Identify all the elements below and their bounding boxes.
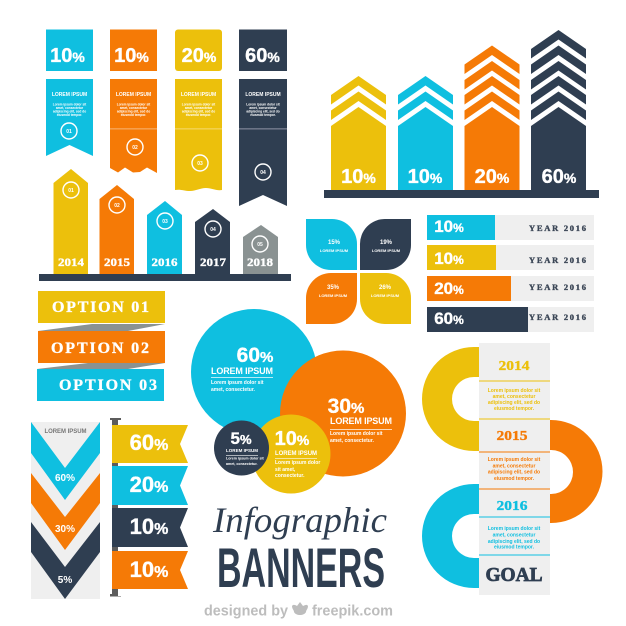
timeline: 2016: adipiscing elit, sed do bbox=[488, 539, 540, 545]
ribbon: yellow 03: eiusmod tempor. bbox=[186, 113, 211, 117]
timeline: 2014 bbox=[479, 359, 550, 420]
column: yellow 10%: 10% bbox=[341, 166, 376, 188]
ribbon: navy 04: 04 bbox=[260, 170, 266, 176]
text: 10%: Lorem ipsum dolor bbox=[275, 460, 320, 466]
bar: yellow 10% bbox=[427, 245, 594, 270]
ribbon: orange 02: LOREM IPSUM bbox=[116, 92, 151, 98]
credit: freepik.com: freepik.com bbox=[312, 604, 393, 620]
circle: yellow 10% bbox=[252, 414, 330, 494]
panel: petal chart bbox=[306, 219, 411, 324]
panel: overlapping circles bbox=[191, 309, 406, 494]
fold: upper bbox=[38, 324, 165, 331]
chevron: blue 60% bbox=[31, 422, 100, 500]
circle: blue 60% bbox=[191, 309, 317, 435]
timeline: 2014: amet, consectetur bbox=[493, 394, 535, 400]
ribbon: navy 04: eiusmod tempor. bbox=[250, 113, 276, 117]
text: 30%: LOREM IPSUM bbox=[330, 416, 392, 426]
text: 5% bbox=[226, 429, 265, 466]
title bbox=[212, 500, 387, 599]
ribbon: yellow 03: LOREM IPSUM bbox=[181, 92, 216, 98]
ribbon: navy 04: adipiscing elit, sed do bbox=[246, 110, 280, 114]
panel: downward chevrons bbox=[31, 422, 100, 599]
text: 5%: 5% bbox=[230, 429, 252, 448]
arrow: 2014: 01 bbox=[68, 188, 74, 194]
ribbon: blue 01: amet, consectetur bbox=[56, 106, 84, 110]
text: 60%: Lorem ipsum dolor sit bbox=[211, 380, 264, 386]
column: yellow 10% bbox=[331, 76, 386, 190]
flag pole bbox=[110, 418, 121, 596]
tab: orange 10% bbox=[110, 30, 157, 71]
ribbon: yellow 03: Lorem ipsum dolor sit bbox=[182, 102, 216, 106]
arrow: 2018: 05 bbox=[257, 242, 263, 248]
ribbon: blue 01: Lorem ipsum dolor sit bbox=[53, 102, 87, 106]
tab: orange 10%: 10% bbox=[114, 45, 149, 67]
title: Infographic: Infographic bbox=[212, 500, 387, 540]
banner: option 02: OPTION 02 bbox=[51, 340, 149, 357]
text: 10%: sit amet, bbox=[275, 467, 296, 473]
base bar bbox=[324, 190, 599, 198]
title: BANNERS: BANNERS bbox=[217, 536, 385, 599]
flag: orange 10%: 10% bbox=[130, 557, 168, 582]
panel: year arrows bbox=[39, 169, 291, 281]
banner: option 03: OPTION 03 bbox=[59, 377, 157, 394]
ribbon: blue 01: 01 bbox=[66, 129, 72, 135]
arrow: 2018: 2018 bbox=[247, 257, 273, 269]
circle: navy 5% bbox=[214, 420, 269, 476]
panel: percentage tabs bbox=[46, 30, 287, 71]
text: 30%: Lorem ipsum dolor sit bbox=[330, 431, 383, 437]
flag: yellow 60%: 60% bbox=[130, 430, 168, 455]
petal: yellow 26%: LOREM IPSUM bbox=[371, 293, 400, 298]
flag: yellow 60% bbox=[112, 425, 188, 463]
text: 60%: amet, consectetur. bbox=[211, 387, 256, 393]
text: 60%: LOREM IPSUM bbox=[211, 366, 273, 376]
arrow: 2015 bbox=[100, 185, 134, 274]
bar: navy 60%: YEAR 2016 bbox=[529, 312, 586, 322]
panel: option banners bbox=[37, 291, 165, 401]
timeline: 2016: eiusmod tempor. bbox=[494, 544, 535, 550]
petal: orange 35%: LOREM IPSUM bbox=[319, 293, 348, 298]
arrow: 2017 bbox=[195, 209, 230, 274]
banner: option 01: OPTION 01 bbox=[52, 299, 149, 316]
timeline: 2015 bbox=[479, 429, 550, 490]
panel: flag banners bbox=[110, 418, 188, 596]
chevron: blue 60%: 60% bbox=[55, 473, 75, 484]
text: 10% bbox=[275, 428, 320, 479]
column: orange 20%: 20% bbox=[475, 166, 510, 188]
petal: blue 15%: 15% bbox=[328, 240, 341, 246]
ribbon: orange 02: eiusmod tempor. bbox=[121, 113, 146, 117]
petal: yellow 26% bbox=[360, 273, 411, 324]
petal: navy 19% bbox=[360, 219, 411, 270]
credit: designed by: designed by bbox=[204, 604, 288, 620]
column: orange 20% bbox=[464, 46, 520, 190]
tab: navy 60% bbox=[239, 30, 287, 71]
timeline: 2016 bbox=[479, 499, 550, 556]
base bar bbox=[39, 274, 291, 281]
petal: navy 19%: 19% bbox=[380, 240, 393, 246]
fold: lower bbox=[37, 363, 165, 369]
arrow: 2016 bbox=[147, 201, 182, 274]
timeline: 2016: Lorem ipsum dolor sit bbox=[488, 526, 541, 532]
half ring: orange bbox=[550, 420, 602, 523]
arrow: 2016: 2016 bbox=[152, 257, 178, 269]
column: navy 60%: 60% bbox=[542, 166, 577, 188]
bar: blue 10% bbox=[427, 215, 594, 240]
tab: yellow 20%: 20% bbox=[182, 45, 217, 67]
chevron: orange 30%: 30% bbox=[55, 524, 75, 535]
timeline: 2015: amet, consectetur bbox=[493, 464, 535, 470]
tab: yellow 20% bbox=[175, 30, 222, 71]
petal: blue 15% bbox=[306, 219, 357, 270]
column: blue 10%: 10% bbox=[408, 166, 443, 188]
chevron background bbox=[31, 422, 100, 599]
timeline: 2014: 2014 bbox=[498, 359, 530, 374]
text: 30% bbox=[328, 395, 392, 444]
panel: chevron columns bbox=[324, 30, 599, 198]
arrow: 2014 bbox=[54, 169, 88, 274]
flag: navy 10%: 10% bbox=[130, 514, 168, 539]
text: 10%: LOREM IPSUM bbox=[275, 451, 317, 457]
icon: freepik logo bbox=[292, 602, 308, 615]
panel: hanging ribbons bbox=[46, 79, 287, 206]
ribbon: navy 04: amet, consectetur bbox=[249, 106, 277, 110]
bar: yellow 10%: 10% bbox=[434, 249, 464, 268]
ribbon: navy 04: LOREM IPSUM bbox=[245, 92, 281, 98]
bar: orange 20%: 20% bbox=[434, 279, 464, 298]
ribbon: orange 02 bbox=[110, 79, 157, 173]
flag: blue 20% bbox=[112, 466, 188, 505]
bar: navy 60% bbox=[427, 307, 594, 332]
flag: blue 20%: 20% bbox=[130, 472, 168, 497]
bar: blue 10%: 10% bbox=[434, 217, 464, 236]
arrow: 2017: 04 bbox=[210, 227, 216, 233]
ribbon: yellow 03: amet, consectetur bbox=[185, 106, 213, 110]
timeline: 2015: eiusmod tempor. bbox=[494, 476, 535, 482]
bar: blue 10%: YEAR 2016 bbox=[529, 223, 586, 233]
tab: navy 60%: 60% bbox=[245, 45, 280, 67]
petal: orange 35% bbox=[306, 273, 357, 324]
ribbon: orange 02: Lorem ipsum dolor sit bbox=[117, 102, 151, 106]
text: 60%: 60% bbox=[237, 344, 273, 367]
half ring: blue bbox=[422, 484, 479, 588]
tab: blue 10%: 10% bbox=[50, 45, 85, 67]
flag: navy 10% bbox=[112, 508, 188, 547]
bar: yellow 10%: YEAR 2016 bbox=[529, 255, 586, 265]
text: 5%: LOREM IPSUM bbox=[226, 448, 258, 453]
timeline: 2015: Lorem ipsum dolor sit bbox=[488, 457, 541, 463]
text: 5%: Lorem ipsum dolor sit bbox=[226, 456, 265, 460]
text: 5%: amet, consectetur. bbox=[226, 462, 258, 466]
arrow: 2017: 2017 bbox=[200, 257, 226, 269]
timeline: 2014: Lorem ipsum dolor sit bbox=[488, 388, 541, 394]
panel: progress bars bbox=[427, 215, 594, 332]
chevron: navy 5% bbox=[31, 522, 100, 599]
ribbon: yellow 03: 03 bbox=[197, 161, 203, 167]
tab: blue 10% bbox=[46, 30, 93, 71]
text: 10%: consectetur. bbox=[275, 473, 305, 479]
arrow: 2015: 2015 bbox=[104, 257, 130, 269]
ribbon: yellow 03: adipiscing elit, sed do bbox=[182, 110, 215, 114]
petal: navy 19%: LOREM IPSUM bbox=[372, 248, 401, 253]
ribbon: yellow 03 bbox=[175, 79, 222, 191]
bar: navy 60%: 60% bbox=[434, 309, 464, 328]
column: navy 60% bbox=[531, 30, 586, 190]
arrow: 2014: 2014 bbox=[58, 257, 84, 269]
ribbon: navy 04 bbox=[239, 79, 287, 206]
bar: orange 20% bbox=[427, 276, 594, 301]
ribbon: blue 01: LOREM IPSUM bbox=[52, 92, 87, 98]
credit bbox=[204, 602, 393, 620]
half ring: yellow bbox=[422, 347, 479, 451]
timeline: 2015: adipiscing elit, sed do bbox=[488, 470, 540, 476]
petal: yellow 26%: 26% bbox=[379, 285, 392, 291]
chevron: orange 30% bbox=[31, 473, 100, 550]
ribbon: orange 02: 02 bbox=[132, 145, 138, 151]
arrow: 2018 bbox=[243, 225, 278, 274]
ribbon: orange 02: amet, consectetur bbox=[120, 106, 148, 110]
chevron: blue 60%: LOREM IPSUM bbox=[44, 429, 86, 435]
arrow: 2015: 02 bbox=[114, 203, 120, 209]
bar: orange 20%: YEAR 2016 bbox=[529, 282, 586, 292]
timeline: 2016: amet, consectetur bbox=[493, 532, 535, 538]
timeline: goal: GOAL bbox=[486, 564, 542, 586]
text: 60% bbox=[211, 344, 273, 393]
timeline: 2015: 2015 bbox=[496, 429, 528, 444]
column: blue 10% bbox=[398, 76, 453, 190]
ribbon: orange 02: adipiscing elit, sed do bbox=[117, 110, 150, 114]
text: 30%: amet, consectetur. bbox=[330, 438, 375, 444]
panel: timeline bbox=[422, 343, 602, 595]
text: 30%: 30% bbox=[328, 395, 364, 418]
timeline panel bbox=[479, 343, 550, 595]
timeline: 2014: eiusmod tempor. bbox=[494, 406, 535, 412]
ribbon: blue 01 bbox=[46, 79, 93, 156]
ribbon: navy 04: Lorem ipsum dolor sit bbox=[246, 102, 281, 106]
chevron: navy 5%: 5% bbox=[58, 575, 72, 586]
timeline: 2014: adipiscing elit, sed do bbox=[488, 400, 540, 406]
circle: orange 30% bbox=[280, 350, 406, 476]
arrow: 2016: 03 bbox=[162, 219, 168, 225]
petal: orange 35%: 35% bbox=[327, 285, 340, 291]
ribbon: blue 01: adipiscing elit, sed do bbox=[53, 110, 86, 114]
petal: blue 15%: LOREM IPSUM bbox=[320, 248, 349, 253]
ribbon: blue 01: eiusmod tempor. bbox=[57, 113, 82, 117]
timeline: 2016: 2016 bbox=[496, 499, 528, 514]
text: 10%: 10% bbox=[275, 428, 310, 450]
flag: orange 10% bbox=[112, 551, 188, 589]
